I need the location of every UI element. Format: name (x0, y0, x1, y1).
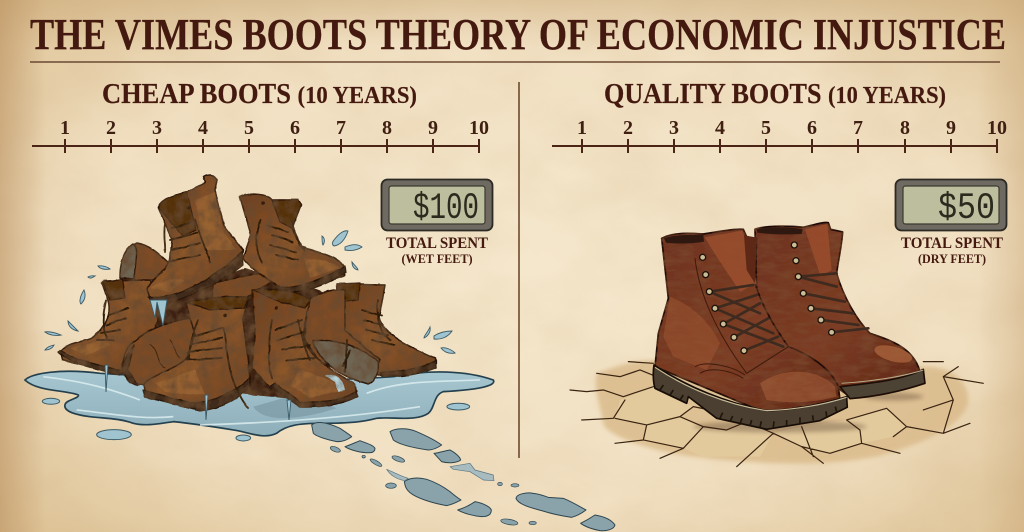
counter: cheap boots total: (WET FEET) (402, 252, 472, 266)
boot: top centre (147, 175, 243, 302)
dark gaps between boots (125, 268, 352, 400)
cracked dry ground (570, 360, 983, 467)
timeline: quality boots: 8 (900, 117, 910, 139)
counter: quality boots total: $50 (938, 188, 995, 230)
timeline: cheap boots: 5 (244, 117, 254, 139)
boot: quality front (653, 229, 847, 429)
counter: cheap boots total (382, 180, 492, 266)
counter: quality boots total: (DRY FEET) (918, 252, 986, 266)
timeline: quality boots: 9 (946, 117, 956, 139)
timeline: cheap boots: 8 (382, 117, 392, 139)
timeline: cheap boots: 1 (60, 117, 70, 139)
puddle (25, 371, 494, 441)
timeline: quality boots: 6 (807, 117, 817, 139)
counter: quality boots total: TOTAL SPENT (901, 235, 1003, 252)
timeline: quality boots (552, 117, 1007, 153)
boot sole (653, 365, 847, 429)
timeline: quality boots: 2 (623, 117, 633, 139)
heading: cheap boots: CHEAP BOOTS (10 YEARS) (102, 79, 417, 110)
counter: cheap boots total: TOTAL SPENT (386, 235, 488, 252)
timeline: cheap boots (32, 117, 489, 153)
quality boots scene (570, 222, 983, 467)
timeline: quality boots: 10 (987, 117, 1007, 139)
timeline: quality boots: 1 (577, 117, 587, 139)
wet footprints (312, 422, 615, 531)
timeline: cheap boots: 10 (469, 117, 489, 139)
timeline: quality boots: 7 (853, 117, 863, 139)
timeline: cheap boots: 4 (198, 117, 208, 139)
timeline: cheap boots: 9 (428, 117, 438, 139)
boot: middle back (213, 274, 274, 302)
boot: right lying sole (305, 289, 380, 384)
timeline: cheap boots: 2 (106, 117, 116, 139)
counter: quality boots total (896, 180, 1006, 266)
boot: right back (337, 283, 436, 377)
timeline: cheap boots: 7 (336, 117, 346, 139)
timeline: cheap boots: 3 (152, 117, 162, 139)
timeline: quality boots: 5 (761, 117, 771, 139)
boot: front left (143, 297, 250, 411)
boot: quality back (755, 222, 925, 399)
boot: lying centre (122, 318, 200, 386)
boot: left (58, 279, 158, 375)
timeline: quality boots: 3 (669, 117, 679, 139)
water drips and splashes (45, 231, 455, 420)
pile of worn cheap boots (58, 175, 436, 411)
counter: cheap boots total: $100 (413, 188, 479, 230)
timeline: quality boots: 4 (715, 117, 725, 139)
boot: front right (252, 289, 358, 407)
timeline: cheap boots: 6 (290, 117, 300, 139)
boot: top right (240, 194, 346, 292)
heading: quality boots: QUALITY BOOTS (10 YEARS) (604, 79, 946, 110)
boot: back left sole (120, 243, 168, 280)
